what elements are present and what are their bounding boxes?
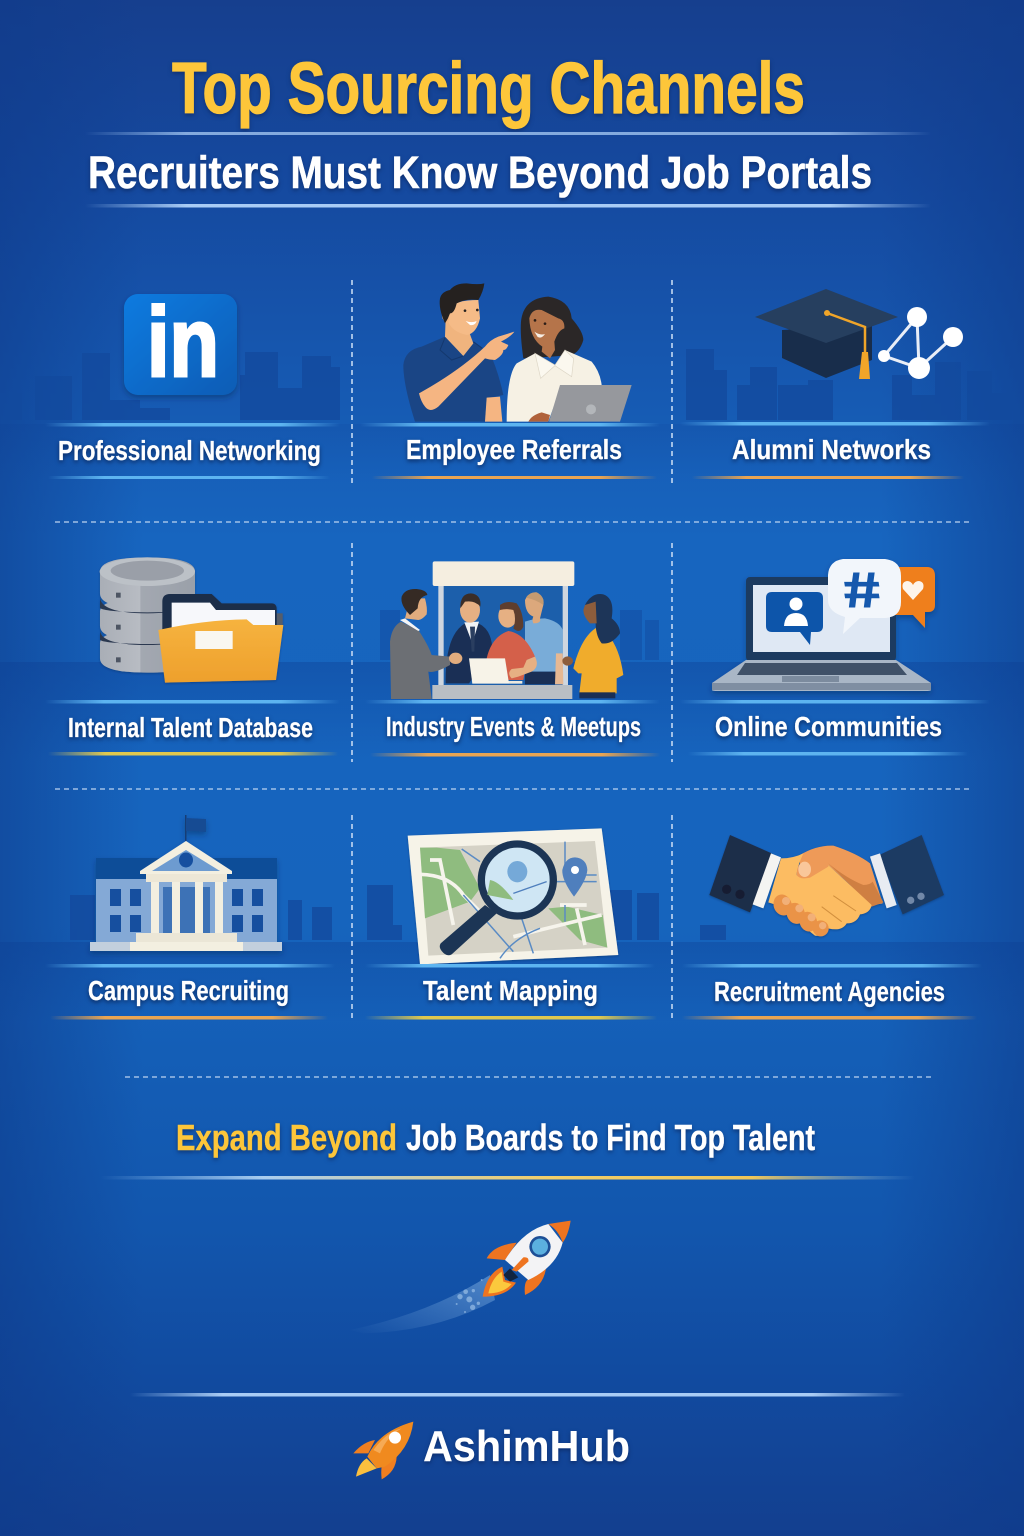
- label: Industry Events & Meetups: [386, 711, 641, 742]
- label: Recruitment Agencies: [714, 976, 945, 1007]
- skyline backdrops: [0, 349, 1012, 940]
- subtitle: Recruiters Must Know Beyond Job Portals: [88, 147, 872, 198]
- cell: Talent Mapping: [365, 828, 657, 1020]
- label: Internal Talent Database: [68, 712, 313, 743]
- grid dividers: [55, 280, 972, 1077]
- label: Online Communities: [715, 711, 942, 742]
- label: Talent Mapping: [423, 975, 598, 1006]
- cell: Professional Networking: [45, 287, 340, 479]
- icon: LinkedIn logo: in: [147, 287, 219, 397]
- cell: Industry Events & Meetups: [365, 561, 660, 756]
- cell: Employee Referrals: [360, 283, 660, 479]
- title: Top Sourcing Channels: [172, 49, 805, 129]
- wordmark: AshimHub: [423, 1422, 630, 1471]
- icon: database and folder: [100, 557, 283, 683]
- icon: map with magnifier: [408, 828, 618, 964]
- icon: laptop with chat bubbles: #: [839, 561, 885, 618]
- logo: AshimHub: [353, 1422, 630, 1479]
- icon: handshake: [709, 835, 944, 936]
- label: Professional Networking: [58, 435, 321, 466]
- label: Employee Referrals: [406, 434, 622, 465]
- cell: Campus Recruiting: [45, 815, 335, 1020]
- icon: graduation cap and network: [755, 289, 963, 379]
- icon: event booth with people: [390, 561, 623, 699]
- icon: rocket with trail: [350, 1221, 571, 1333]
- icon: logo rocket: [353, 1422, 413, 1479]
- cell: Internal Talent Database: [45, 557, 340, 756]
- cell: Online Communities: [680, 559, 990, 756]
- tagline: Expand Beyond: [176, 1117, 397, 1158]
- tagline: Job Boards to Find Top Talent: [406, 1117, 815, 1158]
- icon: campus building: [90, 815, 282, 951]
- label: Campus Recruiting: [88, 975, 289, 1006]
- tagline: [176, 1117, 815, 1158]
- icon: two colleagues: [403, 283, 632, 422]
- cell: Alumni Networks: [680, 289, 990, 479]
- cell: Recruitment Agencies: [682, 835, 982, 1020]
- label: Alumni Networks: [732, 434, 931, 465]
- icon: laptop with chat bubbles: [712, 559, 935, 691]
